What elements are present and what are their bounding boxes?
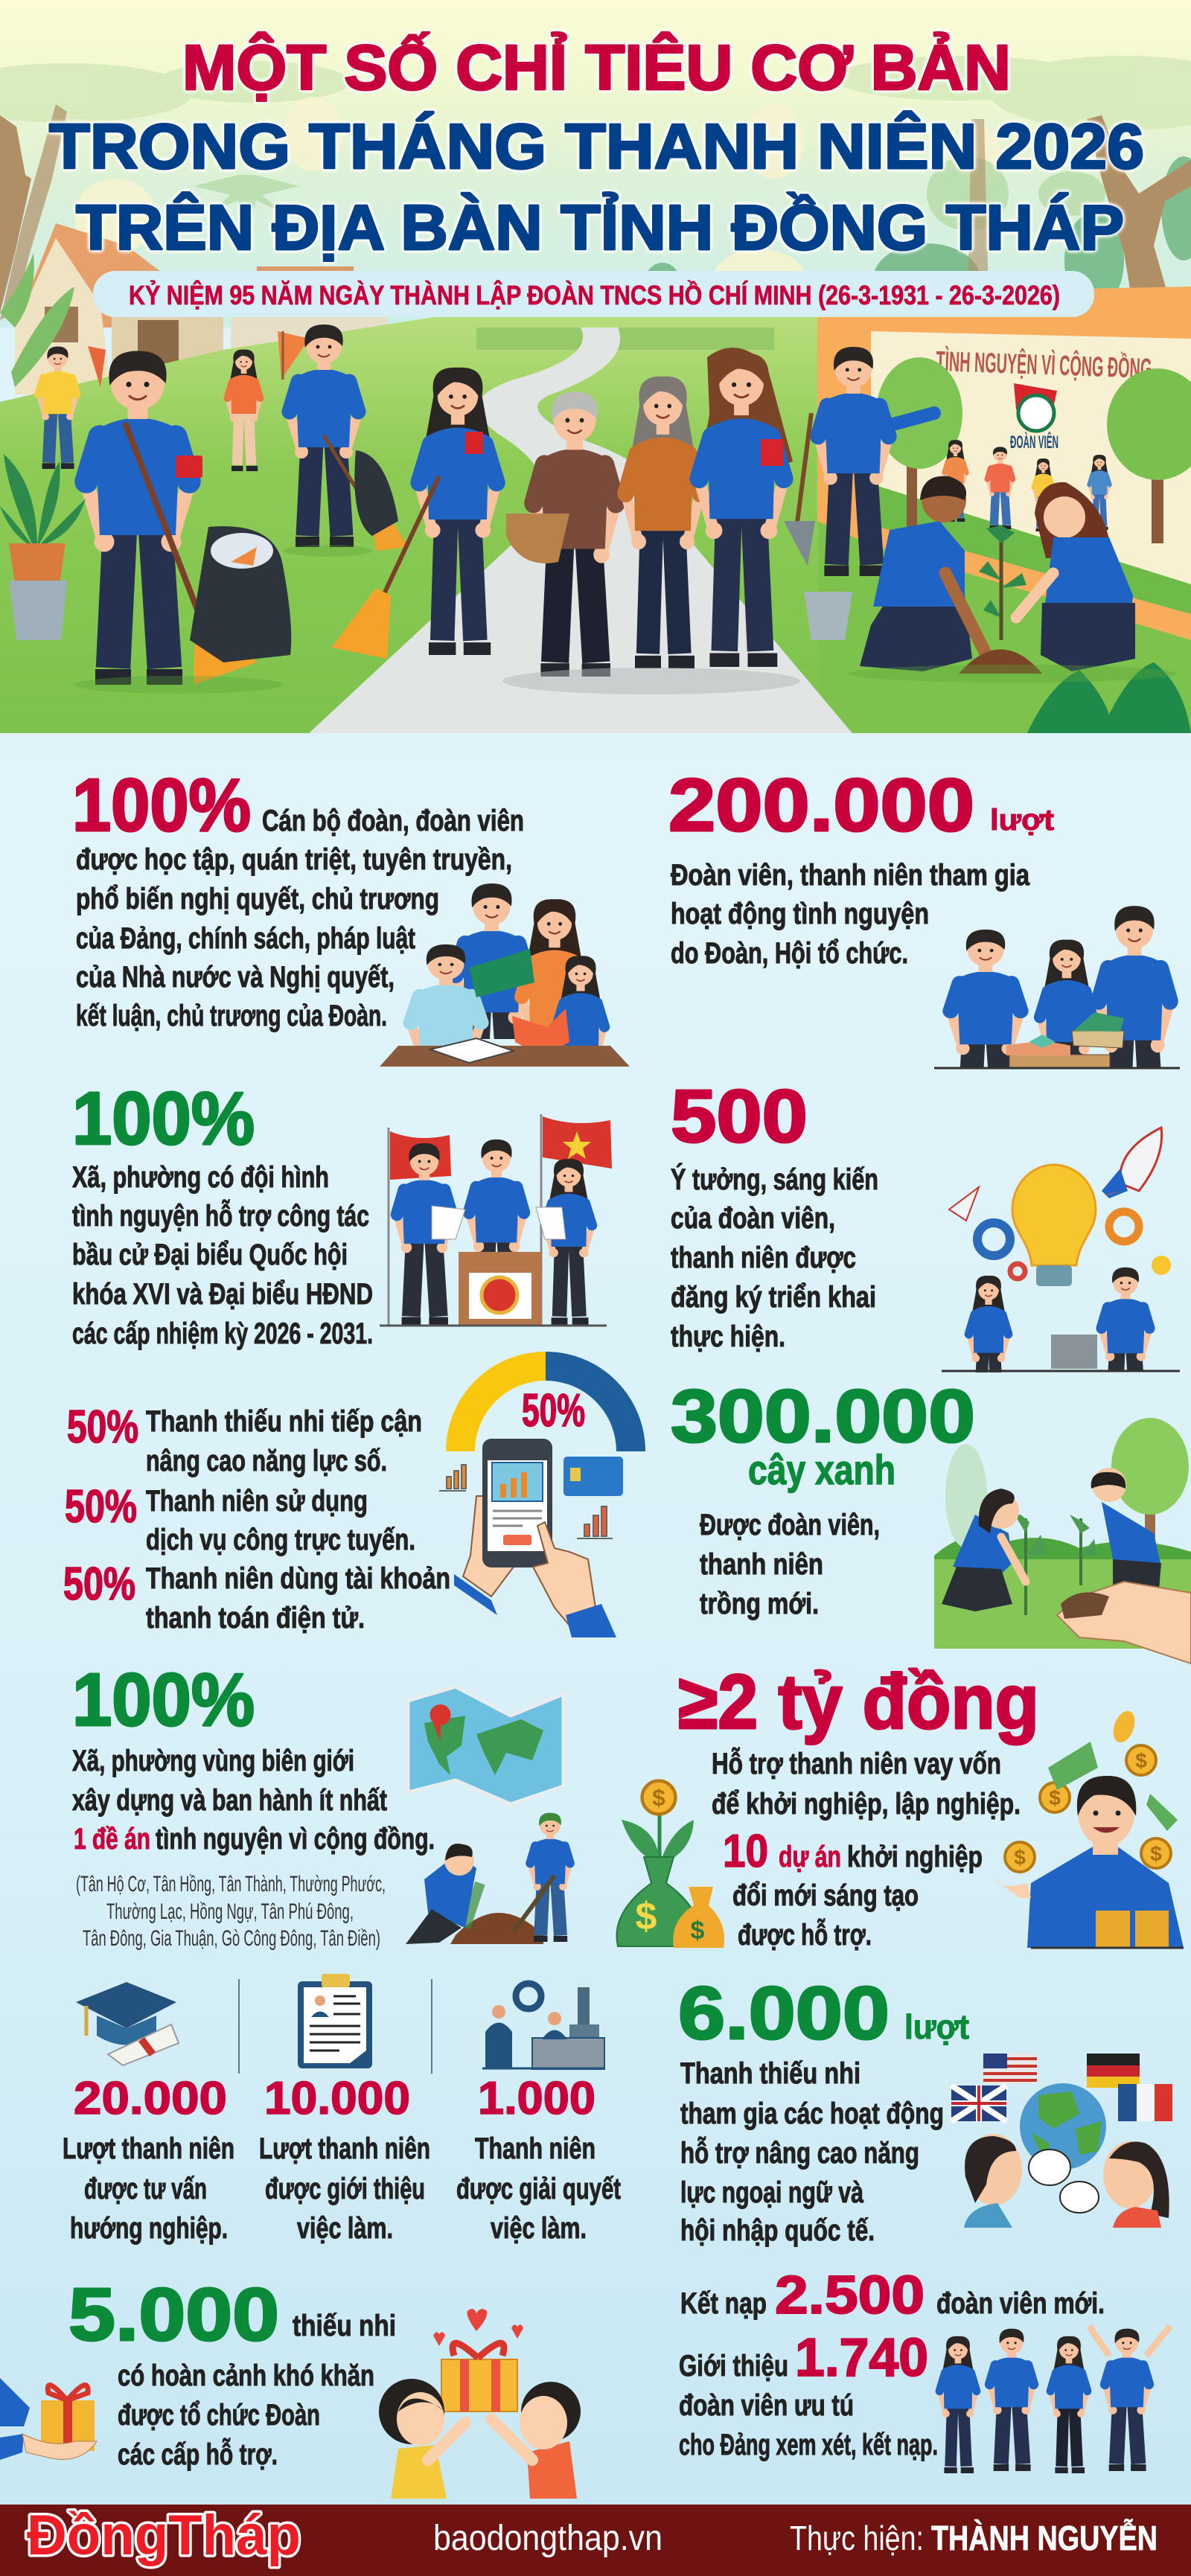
kết nạp line: 2.500: [775, 2266, 925, 2325]
column 1 text: Lượt thanh niên: [63, 2132, 234, 2165]
children running: [39, 331, 309, 471]
icon: graduation cap: [76, 1982, 179, 2065]
stat 2: 50%: [65, 1481, 137, 1533]
description: trồng mới.: [700, 1588, 819, 1620]
kết nạp line: đoàn viên mới.: [936, 2287, 1105, 2320]
giới thiệu lines: đoàn viên ưu tú: [679, 2389, 854, 2422]
description: các cấp nhiệm kỳ 2026 - 2031.: [72, 1317, 373, 1350]
text 2: [146, 1485, 415, 1556]
column 1 text: [63, 2132, 234, 2245]
description: [700, 1509, 880, 1620]
website: baodongthap.vn: [433, 2519, 662, 2558]
description: Cán bộ đoàn, đoàn viên: [262, 805, 524, 837]
description: [671, 1162, 878, 1353]
icon: study group: [380, 883, 630, 1067]
description: hỗ trợ nâng cao năng: [680, 2135, 919, 2170]
shovel and bucket: [784, 413, 852, 640]
panel: digital 50%: [63, 1367, 631, 1637]
stat: 10 projects: 10: [723, 1826, 768, 1877]
text 1: [146, 1405, 422, 1477]
description: [118, 2359, 374, 2471]
stat: 200.000: [668, 764, 974, 847]
commune list: (Tân Hộ Cơ, Tân Hồng, Tân Thành, Thường Phước,: [76, 1872, 386, 1896]
commune list: Thường Lạc, Hồng Ngự, Tân Phú Đông,: [106, 1899, 354, 1924]
giới thiệu lines: Giới thiệu: [679, 2350, 788, 2382]
volunteer with armband and broom: [331, 368, 496, 659]
icon: man with coins: [994, 1708, 1184, 1948]
description: 1 đề án: [74, 1823, 150, 1856]
text 1: nâng cao năng lực số.: [146, 1445, 387, 1477]
lawn: [0, 316, 819, 733]
credit: Thực hiện:: [790, 2519, 924, 2557]
icon: CV clipboard: [298, 1974, 372, 2068]
panel: 2 billion dong: [616, 1659, 1184, 1952]
community board: [817, 287, 1191, 640]
description: Xã, phường có đội hình: [72, 1161, 329, 1194]
description: lực ngoại ngữ và: [680, 2176, 864, 2209]
stat: 10 projects: đổi mới sáng tạo: [732, 1879, 919, 1912]
title line 1: MỘT SỐ CHỈ TIÊU CƠ BẢN: [182, 32, 1011, 103]
panel: new members: [679, 2266, 1170, 2473]
description: thanh niên được: [671, 1241, 856, 1274]
commune list: [76, 1872, 386, 1951]
description: kết luận, chủ trương của Đoàn.: [76, 1000, 387, 1032]
divider left: [239, 1979, 432, 2074]
kết nạp line: Kết nạp: [680, 2287, 767, 2320]
description: [76, 805, 524, 1032]
column 2 text: việc làm.: [297, 2212, 393, 2245]
description: khóa XVI và Đại biểu HĐND: [72, 1278, 373, 1311]
description: của Đảng, chính sách, pháp luật: [76, 922, 415, 955]
column 3 text: việc làm.: [491, 2212, 587, 2245]
icon: voting with flags: [380, 1114, 612, 1326]
panel: 6.000 language: [678, 1972, 1172, 2247]
description: hoạt động tình nguyện: [671, 898, 929, 930]
title: [49, 32, 1144, 263]
stat: 5.000: [68, 2273, 279, 2356]
description: của Nhà nước và Nghị quyết,: [76, 961, 395, 994]
icon: money bags: $: [691, 1917, 705, 1945]
description: xây dựng và ban hành ít nhất: [72, 1784, 387, 1817]
icon: hands with gift: [0, 2378, 97, 2460]
panel: 100% officials study: [76, 777, 630, 1067]
icon: planting trees: [934, 1418, 1191, 1663]
description: Hỗ trợ thanh niên vay vốn: [712, 1746, 1001, 1780]
stat: 100%: [72, 1077, 255, 1160]
icon: factory and workers: [482, 1984, 604, 2069]
description: [671, 859, 1030, 970]
foreground leaves: [1027, 662, 1191, 733]
column 3 text: Thanh niên: [475, 2132, 596, 2165]
stats: 20.000: [74, 2073, 227, 2124]
icon: globe, flags and speakers: [951, 2054, 1172, 2228]
description: đăng ký triển khai: [671, 1281, 876, 1314]
description: có hoàn cảnh khó khăn: [118, 2359, 374, 2392]
panel: 100% election support: [72, 1077, 612, 1350]
text 3: Thanh niên dùng tài khoản: [146, 1562, 450, 1595]
column 2 text: Lượt thanh niên: [259, 2132, 430, 2165]
subtitle pill: [93, 271, 1094, 317]
stat: 10 projects: được hỗ trợ.: [738, 1917, 872, 1952]
commune list: Tân Đông, Gia Thuận, Gò Công Đông, Tân Điền): [83, 1926, 380, 1951]
kết nạp line: [680, 2266, 1105, 2325]
logo: ĐồngTháp: [27, 2504, 301, 2567]
column 2 text: [259, 2132, 430, 2245]
title line 3: TRÊN ĐỊA BÀN TỈNH ĐỒNG THÁP: [76, 192, 1124, 263]
stat: 10 projects: khởi nghiệp: [847, 1841, 983, 1873]
icon: volunteers packing: [934, 906, 1180, 1149]
description: Ý tưởng, sáng kiến: [671, 1162, 878, 1196]
column 3 text: được giải quyết: [456, 2173, 621, 2205]
text 3: [146, 1562, 450, 1634]
volunteer sweeping, back: [290, 325, 408, 551]
description: phổ biến nghị quyết, chủ trương: [76, 883, 439, 915]
description: [72, 1745, 435, 1856]
description: bầu cử Đại biểu Quốc hội: [72, 1239, 348, 1271]
icon: money bags: [616, 1781, 724, 1948]
icon: map: [408, 1687, 563, 1804]
description: hội nhập quốc tế.: [680, 2214, 875, 2247]
gauge: 50%: [522, 1385, 585, 1436]
giới thiệu lines: cho Đảng xem xét, kết nạp.: [679, 2429, 938, 2461]
scattered shadows: [74, 545, 1176, 694]
winding path: [309, 327, 852, 733]
description: Thanh thiếu nhi: [680, 2057, 860, 2090]
description: tình nguyện vì cộng đồng.: [156, 1823, 435, 1856]
stat: 100%: [72, 1658, 255, 1742]
unit: lượt: [904, 2007, 969, 2046]
text 2: dịch vụ công trực tuyến.: [146, 1524, 415, 1556]
title line 2: TRONG THÁNG THANH NIÊN 2026: [49, 111, 1144, 182]
description: của đoàn viên,: [671, 1202, 835, 1235]
icon: four young members: [939, 2326, 1170, 2473]
community board: ĐOÀN VIÊN: [1010, 432, 1059, 453]
panel: 500 ideas: [671, 1075, 1180, 1423]
icon: children receiving gift: [379, 2309, 581, 2499]
plant and bucket: [0, 454, 86, 640]
description: được tổ chức Đoàn: [118, 2399, 320, 2432]
description: để khởi nghiệp, lập nghiệp.: [712, 1788, 1021, 1821]
icon: light bulb with rockets: [942, 1128, 1180, 1423]
icon: gardeners: [406, 1813, 570, 1944]
description: Xã, phường vùng biên giới: [72, 1745, 354, 1777]
stats: 10.000: [264, 2073, 410, 2124]
stat: 300.000: [671, 1375, 975, 1458]
unit: lượt: [990, 804, 1054, 837]
column 1 text: được tư vấn: [84, 2173, 207, 2205]
stat: 100%: [72, 764, 251, 847]
stats: 1.000: [478, 2073, 596, 2124]
background foliage: [0, 56, 1191, 315]
hero illustration: [0, 0, 1191, 733]
icon: money bags: $: [636, 1895, 657, 1938]
panel: 5.000 children: [0, 2273, 581, 2499]
stats: [74, 2073, 596, 2124]
description: tình nguyện hỗ trợ công tác: [72, 1198, 369, 1233]
description: [680, 2057, 944, 2247]
elderly woman in orange: [625, 377, 700, 668]
description: Đoàn viên, thanh niên tham gia: [671, 859, 1030, 892]
gauge: [460, 1367, 631, 1451]
description: Được đoàn viên,: [700, 1509, 880, 1541]
text 2: Thanh niên sử dụng: [146, 1485, 368, 1518]
background trees: [0, 104, 1191, 320]
unit: thiếu nhi: [293, 2310, 396, 2342]
stat: ≥2 tỷ đồng: [678, 1659, 1039, 1745]
description: tham gia các hoạt động: [680, 2097, 944, 2130]
giới thiệu lines: [679, 2328, 938, 2461]
stat: 6.000: [678, 1972, 890, 2055]
volunteer with broom, left: [86, 351, 291, 685]
house: [0, 223, 387, 394]
stat: 10 projects: dự án: [779, 1841, 841, 1873]
volunteer painting the board: [818, 347, 934, 576]
description: thanh niên: [700, 1548, 823, 1581]
panel: 100% border communes: [72, 1658, 570, 1951]
stat 1: 50%: [67, 1402, 138, 1453]
description: được học tập, quán triệt, tuyên truyền,: [76, 843, 512, 876]
text 1: Thanh thiếu nhi tiếp cận: [146, 1405, 422, 1438]
stat 3: 50%: [63, 1559, 135, 1610]
description: do Đoàn, Hội tổ chức.: [671, 937, 908, 970]
column 1 text: hướng nghiệp.: [70, 2212, 228, 2245]
footer: [0, 2504, 1191, 2576]
volunteer in blue supporting elders: [699, 348, 793, 667]
column 2 text: được giới thiệu: [265, 2173, 425, 2205]
panel: 200.000 volunteers: [668, 764, 1180, 1149]
description: các cấp hỗ trợ.: [118, 2437, 278, 2471]
description: thực hiện.: [671, 1320, 785, 1353]
giới thiệu lines: 1.740: [795, 2328, 928, 2388]
panel: career stats: [63, 1974, 621, 2245]
text 3: thanh toán điện tử.: [146, 1602, 365, 1634]
credit: [790, 2519, 1158, 2557]
description: [712, 1746, 1021, 1821]
icon: phone with hands: [439, 1439, 623, 1637]
elderly woman with basket: [506, 391, 616, 677]
stat: 500: [671, 1075, 808, 1158]
column 3 text: [456, 2132, 621, 2245]
panel: 300.000 trees: [671, 1375, 1191, 1663]
description: [72, 1161, 373, 1350]
kneeling pair planting a tree: [860, 476, 1135, 674]
stat: 10 projects: [723, 1826, 983, 1952]
unit: cây xanh: [748, 1446, 895, 1493]
